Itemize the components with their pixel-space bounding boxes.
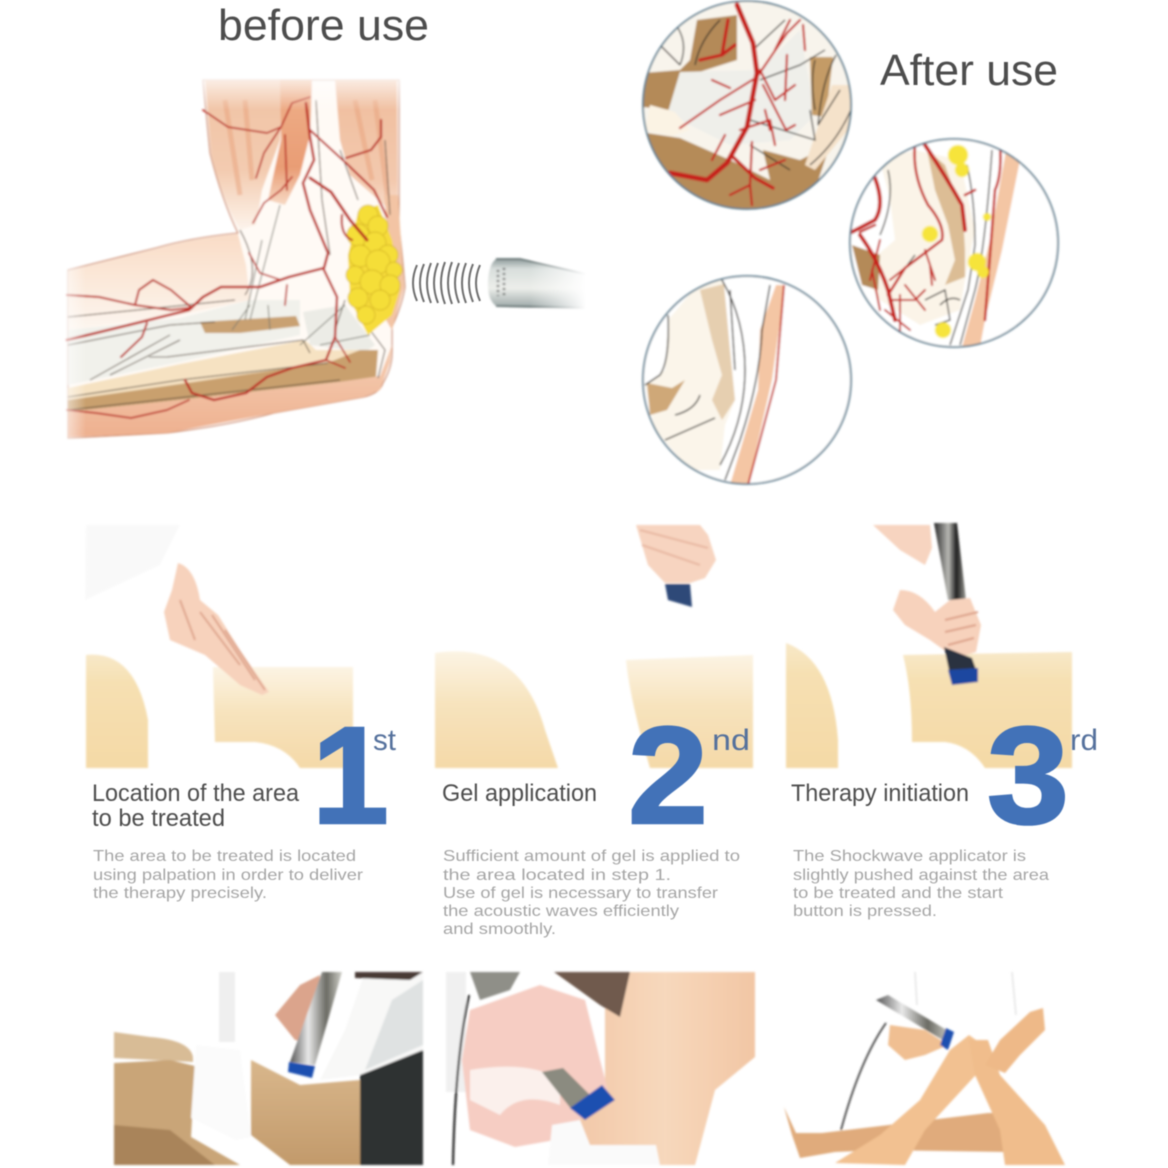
step heading: Location of the area — [92, 780, 300, 807]
muscle: upper right — [335, 80, 398, 225]
step description: the therapy precisely. — [93, 885, 267, 902]
arteries: red vessels — [67, 97, 387, 418]
muscle: upper left — [205, 80, 282, 230]
illustration: elbow before treatment — [67, 80, 405, 438]
step description: slightly pushed against the area — [793, 867, 1049, 884]
ligaments: joint — [303, 305, 375, 352]
step description — [93, 848, 364, 902]
photo: treating the neck and shoulder — [446, 972, 755, 1165]
fat deposit: yellow calcification cluster — [346, 205, 402, 335]
step heading — [92, 780, 300, 832]
fade: left of forearm — [60, 262, 86, 446]
ligaments: forearm — [68, 300, 300, 385]
step description: using palpation in order to deliver — [93, 867, 364, 884]
step description: to be treated and the start — [793, 885, 1004, 902]
panel: step 2, gel application — [435, 525, 753, 938]
step description: The area to be treated is located — [93, 848, 356, 865]
photo: palpating the treatment area — [85, 525, 353, 768]
numeral: 3: 3 — [987, 699, 1069, 853]
heading: before use: before use — [218, 1, 429, 50]
circle: after use, dense new blood vessels — [643, 1, 855, 215]
step description — [443, 848, 740, 938]
muscle: centre strip — [268, 80, 312, 205]
ordinal: nd: nd — [712, 724, 750, 757]
step heading: Gel application — [442, 780, 597, 807]
fade: top of arm — [190, 68, 415, 110]
step description: the area located in step 1. — [443, 867, 671, 884]
bone: tan band — [68, 350, 378, 412]
numeral: 2: 2 — [628, 699, 708, 853]
step heading: to be treated — [92, 805, 225, 832]
photo: pressing applicator to skin — [786, 523, 1072, 768]
step description: Use of gel is necessary to transfer — [443, 885, 719, 902]
step description: Sufficient amount of gel is applied to — [443, 848, 740, 865]
photo: applying gel — [435, 525, 753, 768]
bone: light band — [68, 340, 360, 400]
step description — [793, 848, 1049, 920]
forearm: upper skin — [68, 234, 250, 330]
skin: lower forearm band — [68, 345, 392, 437]
muscle stripes — [225, 100, 388, 200]
outlines: bones and tendons — [68, 100, 390, 410]
icon: acoustic shock waves — [413, 262, 480, 304]
bone: tan upper sliver — [200, 316, 300, 333]
photo: treating the knee — [784, 972, 1065, 1165]
step description: button is pressed. — [793, 903, 937, 920]
panel: step 3, therapy initiation — [786, 523, 1098, 920]
numeral: 1: 1 — [312, 699, 389, 853]
ordinal: st: st — [373, 724, 397, 757]
panel: step 1, location of the area — [85, 525, 397, 902]
circle: after use, fat partly dissolved — [850, 139, 1058, 347]
step description: and smoothly. — [443, 921, 556, 938]
step description: The Shockwave applicator is — [793, 848, 1026, 865]
photo: treating the lower back — [114, 972, 423, 1165]
skin: outer elbow edge — [384, 195, 404, 330]
icon: shockwave applicator head — [488, 255, 600, 315]
step description: the acoustic waves efficiently — [443, 903, 679, 920]
step heading: Therapy initiation — [791, 780, 969, 807]
arm base shape — [68, 80, 405, 438]
heading: After use: After use — [880, 46, 1058, 95]
circle: after use, healed tissue — [643, 276, 851, 485]
ordinal: rd: rd — [1070, 724, 1098, 757]
